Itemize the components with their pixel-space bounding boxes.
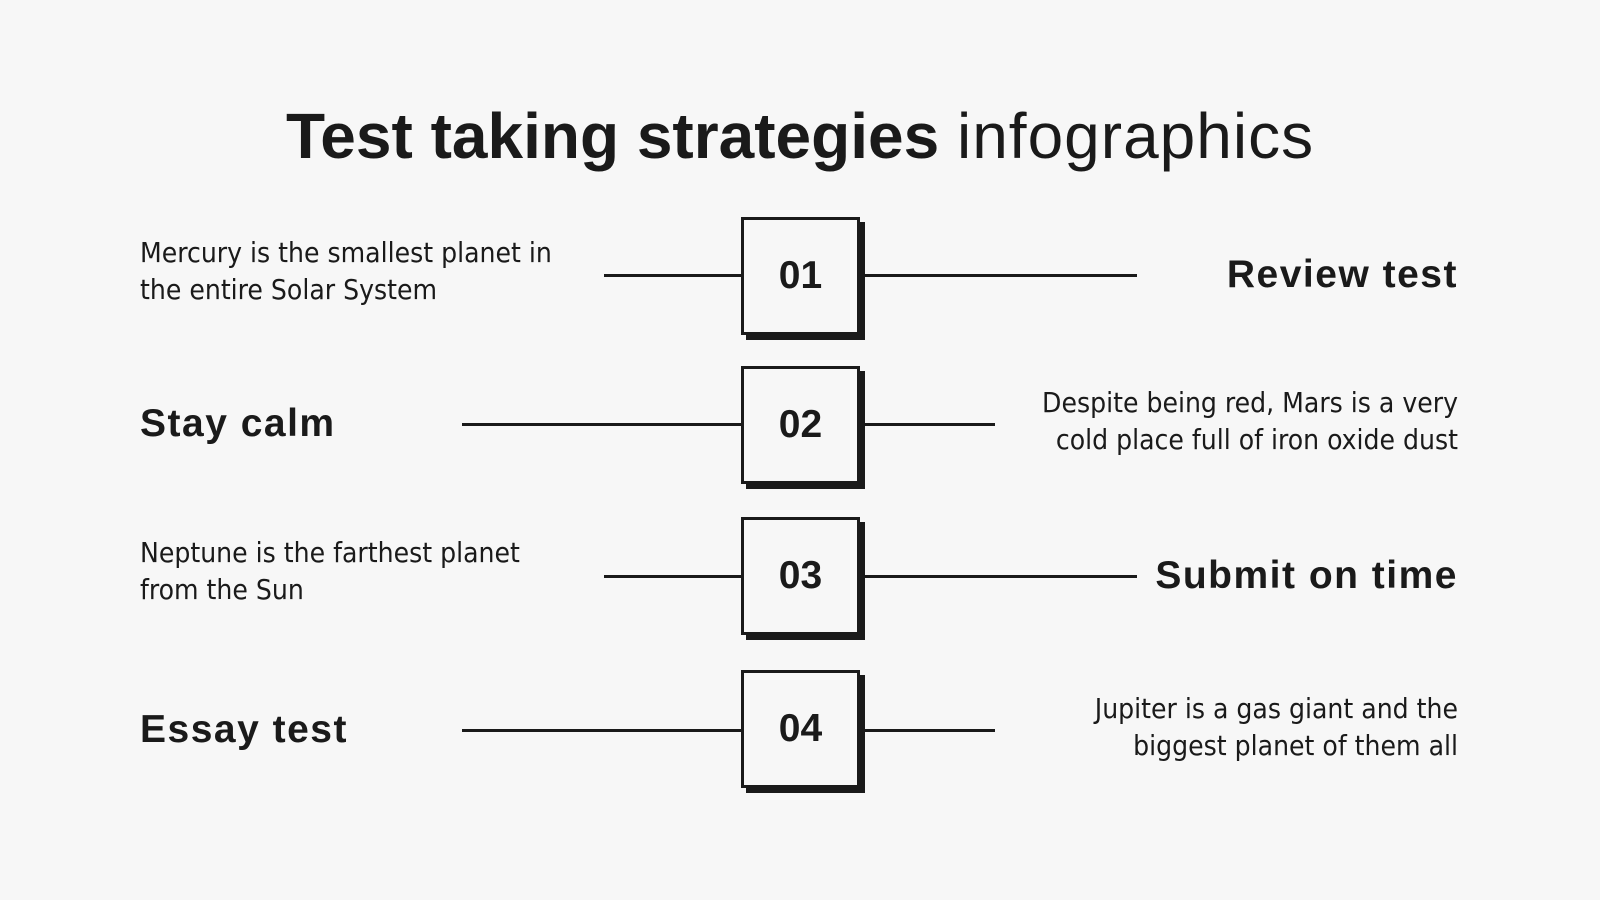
box 04: 04 [779, 707, 822, 750]
heading: Review test: Review test [1227, 253, 1458, 296]
box 02 [741, 366, 860, 484]
title: Test taking strategies infographics [286, 100, 1314, 172]
text: Jupiter: Jupiter is a gas giant and the biggest planet of them all [1095, 692, 1458, 762]
box 01: 01 [779, 254, 822, 297]
box 01 [741, 217, 860, 335]
heading: Essay test: Essay test [140, 708, 348, 751]
heading: Stay calm: Stay calm [140, 402, 336, 445]
row 4 [140, 670, 1458, 793]
row 1 [140, 217, 1458, 340]
text: Mercury: Mercury is the smallest planet in the entire Solar System [140, 236, 552, 306]
box 03 [741, 517, 860, 635]
heading: Submit on time: Submit on time [1155, 554, 1458, 597]
box 02: 02 [779, 403, 822, 446]
box 04 [741, 670, 860, 788]
box 03: 03 [779, 554, 822, 597]
row 3 [140, 517, 1458, 640]
text: Neptune: Neptune is the farthest planet from the Sun [140, 536, 520, 606]
text: Mars: Despite being red, Mars is a very cold place full of iron oxide dust [1042, 386, 1458, 456]
row 2 [140, 366, 1458, 489]
